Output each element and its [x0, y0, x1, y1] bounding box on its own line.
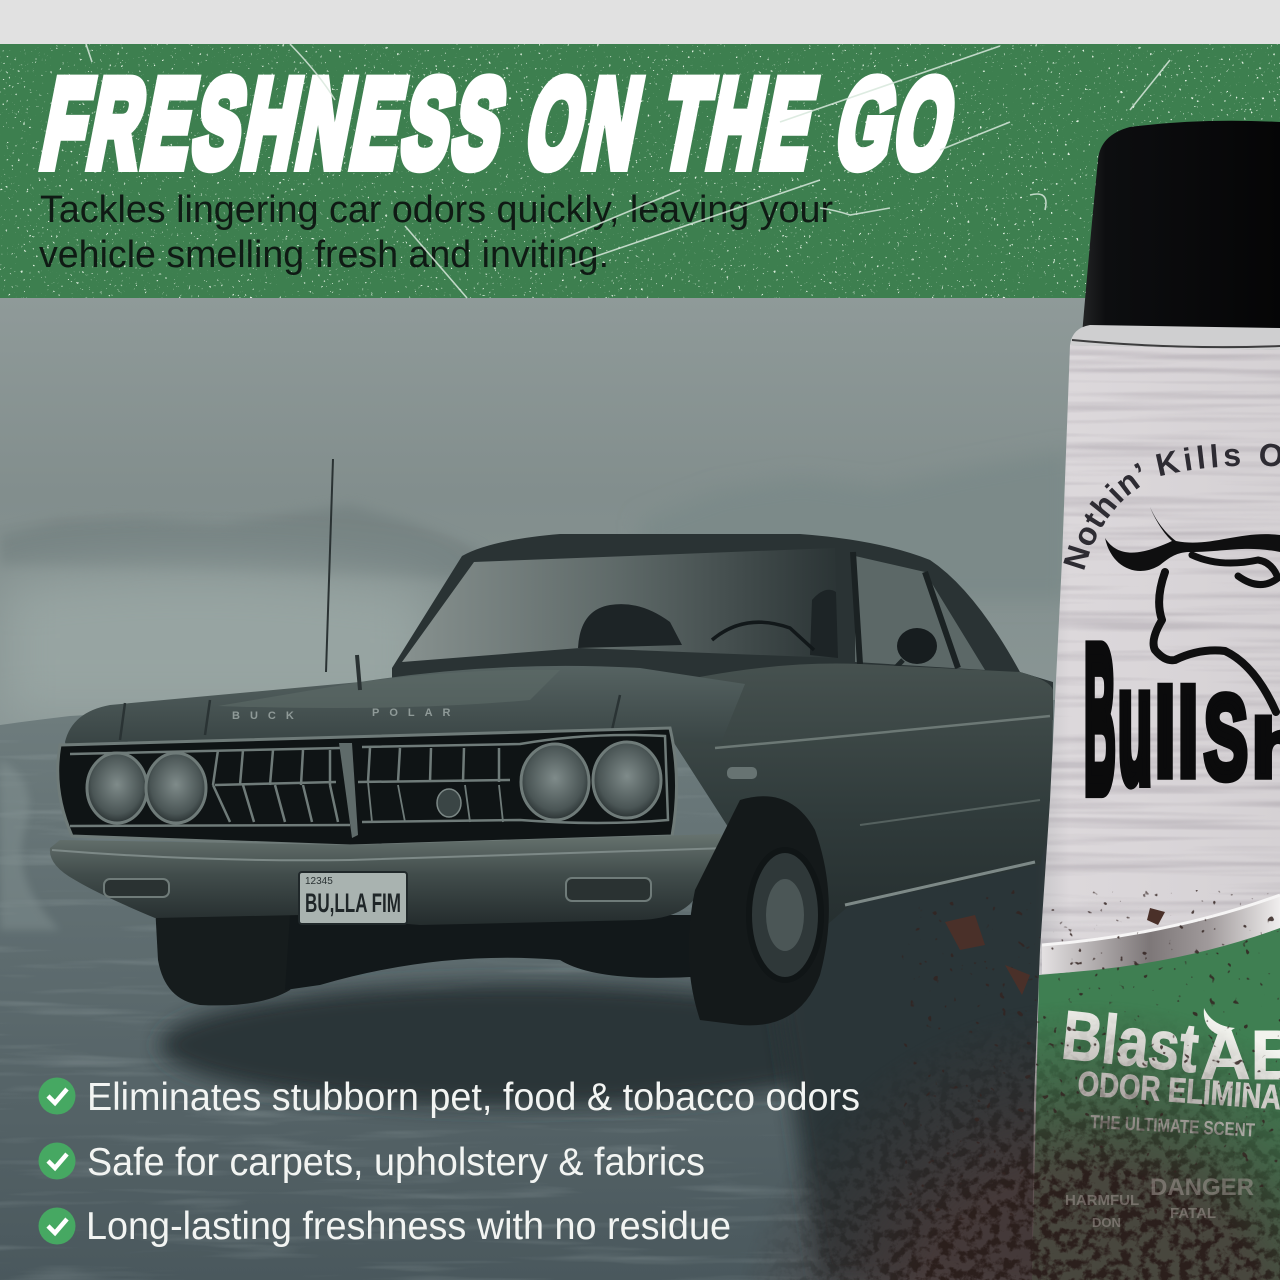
grille centre post [339, 743, 358, 838]
car [50, 459, 1053, 1025]
can body [1032, 345, 1280, 1280]
green header banner [0, 44, 1280, 298]
mirror [882, 628, 937, 682]
label text: THE ULTIMATE SCENT [1090, 1110, 1256, 1141]
roof and cabin [392, 534, 1053, 720]
brand name: S [1204, 673, 1248, 804]
benefit 1: Eliminates stubborn pet, food & tobacco odors [87, 1076, 860, 1119]
faded warning text: DON [1092, 1215, 1121, 1230]
tyre: front right [689, 796, 829, 1025]
horn on label [1204, 1008, 1235, 1036]
hood ornament [357, 655, 360, 690]
distressed speckle overlay [0, 44, 1280, 298]
bumper [50, 834, 730, 925]
faded warning text: FATAL [1170, 1205, 1216, 1222]
tyre: front left [155, 905, 303, 1005]
background scene: misty hills and road [0, 298, 1280, 1280]
interior silhouettes [578, 590, 838, 658]
faded warning text [1065, 1174, 1254, 1230]
benefit list [38, 1076, 860, 1248]
brand name: ll [1156, 669, 1202, 800]
label text: Blast [1058, 997, 1202, 1088]
grille bars [70, 735, 668, 826]
antenna [326, 459, 333, 672]
brand name: B [1084, 603, 1116, 835]
turn signals [104, 878, 651, 901]
hood [65, 666, 745, 760]
benefit 3: Long-lasting freshness with no residue [86, 1205, 731, 1248]
licence plate [299, 872, 407, 924]
brand name: u [1118, 633, 1152, 817]
subheading: Tackles lingering car odors quickly, leaving your [40, 189, 833, 231]
bull horns [1105, 507, 1280, 571]
dirt burst [764, 1011, 1280, 1280]
label text [1058, 997, 1280, 1141]
licence plate: BU,LLA FIM [305, 888, 401, 918]
faded warning text: HARMFUL [1065, 1192, 1139, 1209]
under car shadow [285, 915, 720, 990]
windshield [402, 548, 838, 662]
brushed metal texture [1030, 345, 1280, 985]
hood emblem letters: BUCK [232, 710, 304, 722]
licence plate: 12345 [305, 876, 333, 887]
headlights [87, 742, 661, 823]
flying dirt specks [900, 890, 1280, 1220]
bull logo [1105, 507, 1280, 712]
subheading [39, 189, 833, 276]
product can [1032, 120, 1280, 1280]
grille surround [58, 728, 677, 846]
benefit 2: Safe for carpets, upholstery & fabrics [87, 1141, 705, 1184]
badge [437, 789, 461, 817]
scratches [86, 44, 1170, 298]
can neck ring [1070, 325, 1280, 350]
hood emblem letters [232, 707, 460, 722]
headline: FRESHNESS ON THE GO [33, 54, 970, 193]
brand name [1084, 603, 1280, 835]
top grey band [0, 0, 1280, 44]
hood emblem letters: POLAR [372, 707, 460, 719]
can cap [1082, 121, 1280, 335]
bull head outline [1154, 555, 1278, 712]
subheading: vehicle smelling fresh and inviting. [39, 234, 609, 276]
side windows [855, 556, 985, 670]
silver swoosh [1042, 895, 1280, 974]
body side [640, 664, 1053, 1000]
faded warning text: DANGER [1150, 1174, 1254, 1201]
green lower label [1032, 925, 1280, 1280]
